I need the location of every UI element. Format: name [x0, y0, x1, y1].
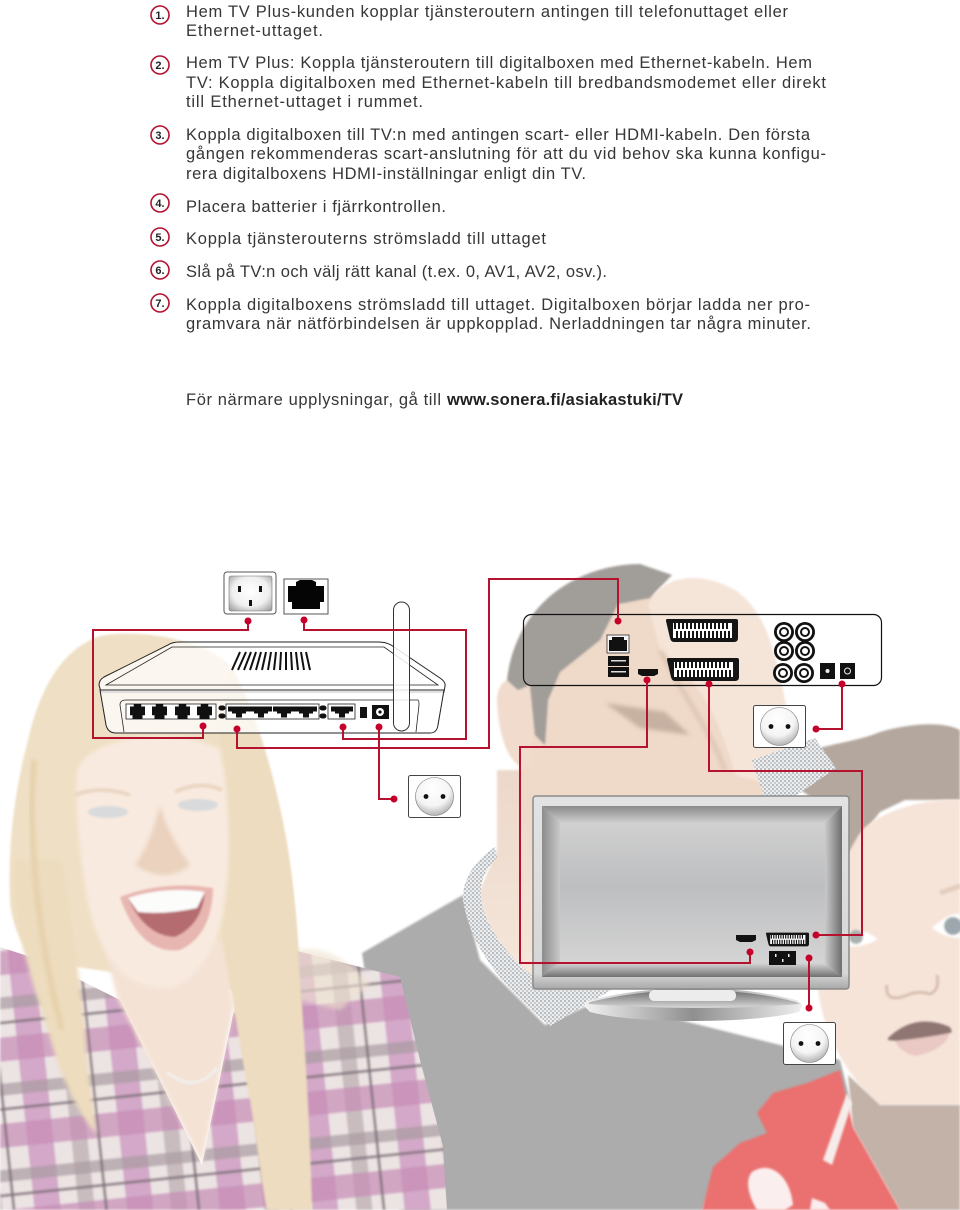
man sweater — [362, 895, 850, 1210]
icon: digital box — [524, 614, 882, 686]
cable: tv power — [806, 954, 812, 1012]
boy face — [818, 800, 960, 1105]
router ethernet ports — [226, 704, 319, 719]
instruction number 7 — [151, 294, 169, 312]
step 2 text: till Ethernet-uttaget i rummet. — [186, 93, 423, 111]
boy red hoodie — [702, 1070, 900, 1210]
icon: tv wall outlet — [784, 1022, 836, 1064]
router vents — [232, 652, 310, 670]
router power port — [372, 705, 389, 719]
router status dots — [221, 708, 223, 716]
tv stand — [584, 988, 802, 1021]
instruction number 3 — [151, 126, 169, 144]
girl left hair over shirt — [14, 860, 97, 1135]
box outline — [524, 614, 882, 686]
step 3 text: Koppla digitalboxen till TV:n med antingen scart- eller HDMI-kabeln. Den första — [186, 126, 811, 144]
instruction number 1 — [151, 6, 169, 24]
tv scart port — [766, 933, 809, 946]
boy eyes — [842, 886, 960, 947]
girl right hair band — [215, 669, 312, 1210]
tv HDMI port — [736, 935, 756, 942]
boy neck — [848, 1075, 960, 1210]
man shirt collar — [463, 847, 620, 1026]
man neck — [478, 770, 600, 990]
cable: box scart to tv — [706, 680, 862, 938]
man hand on head — [648, 578, 796, 785]
step 3 text — [186, 126, 826, 183]
hoodie details — [748, 1093, 852, 1210]
cable: router power — [376, 724, 398, 802]
tv bevel — [542, 806, 842, 977]
girl nose shadow — [135, 805, 190, 875]
step 1 text: Hem TV Plus-kunden kopplar tjänsteroutern antingen till telefonuttaget eller — [186, 3, 789, 21]
instruction number 2: 2. — [155, 60, 165, 72]
girl neck — [105, 940, 234, 1163]
icon: router wall outlet — [408, 776, 460, 818]
step 1 text — [186, 3, 789, 40]
step 2 text: Hem TV Plus: Koppla tjänsteroutern till digitalboxen med Ethernet-kabeln. Hem — [186, 54, 812, 72]
man hair — [507, 564, 672, 745]
background photo of family — [0, 564, 960, 1210]
icon: box wall outlet — [754, 706, 806, 748]
box RCA connectors — [773, 622, 815, 683]
girl smile — [120, 885, 213, 950]
cable: router socket loop — [93, 618, 252, 738]
box scart bottom — [667, 658, 739, 681]
further information link: www.sonera.fi/asiakastuki/TV — [446, 391, 683, 409]
instruction number 6: 6. — [155, 265, 165, 277]
cable: router to box ethernet — [234, 579, 622, 748]
boy hair — [772, 724, 960, 900]
girl face — [76, 736, 229, 988]
step 5 text: Koppla tjänsterouterns strömsladd till uttaget — [186, 230, 546, 248]
step 2 text — [186, 54, 826, 111]
step 1 text: Ethernet-uttaget. — [186, 22, 323, 40]
girl shoulder hair strands — [293, 949, 370, 1010]
router antenna — [394, 602, 410, 731]
tv frame — [533, 796, 849, 989]
instruction number 5: 5. — [155, 232, 165, 244]
router LAN ports — [126, 704, 216, 719]
instruction number 7: 7. — [155, 298, 165, 310]
box scart top — [666, 619, 738, 642]
cable: box power — [812, 680, 846, 732]
further information link: För närmare upplysningar, gå till — [186, 391, 441, 409]
step 6 text: Slå på TV:n och välj rätt kanal (t.ex. 0, AV1, AV2, osv.). — [186, 263, 607, 281]
icon: telephone jack — [284, 579, 328, 614]
step 7 text: gramvara när nätförbindelsen är uppkopplad. Nerladdningen tar några minuter. — [186, 315, 811, 333]
step 7 text: Koppla digitalboxens strömsladd till uttaget. Digitalboxen börjar ladda ner pro- — [186, 296, 810, 314]
tv screen — [560, 823, 825, 963]
router top surface — [99, 642, 445, 692]
man head skin — [511, 589, 792, 985]
instruction number 4 — [151, 194, 169, 212]
instruction number 2 — [151, 56, 169, 74]
icon: television — [533, 796, 849, 1021]
box USB ports — [608, 656, 629, 677]
further information link — [186, 391, 683, 409]
girl shirt plaid — [0, 930, 450, 1210]
instruction number 3: 3. — [155, 130, 165, 142]
girl eyes and brows — [75, 785, 222, 818]
man face shadows — [605, 650, 725, 770]
girl hair streak — [32, 760, 62, 1030]
step 7 text — [186, 296, 811, 333]
step 4 text: Placera batterier i fjärrkontrollen. — [186, 198, 446, 216]
man ear — [497, 679, 535, 767]
boy nose and mouth — [887, 975, 952, 1056]
girl back hair — [10, 634, 300, 1000]
man right collar — [752, 738, 836, 815]
box HDMI port — [638, 669, 658, 676]
icon: C13 power socket — [224, 572, 276, 614]
cable: router telephone loop — [300, 616, 466, 739]
cable: box HDMI to tv — [520, 676, 754, 963]
step 3 text: rera digitalboxens HDMI-inställningar enligt din TV. — [186, 165, 586, 183]
girl necklace — [167, 1068, 217, 1083]
tv power port — [769, 951, 796, 965]
box power ports — [820, 663, 855, 679]
icon: router — [99, 602, 445, 733]
router button — [360, 707, 367, 718]
step 2 text: TV: Koppla digitalboxen med Ethernet-kabeln till bredbandsmodemet eller direkt — [186, 74, 826, 92]
instruction number 1: 1. — [155, 10, 165, 22]
box ethernet port — [607, 635, 629, 653]
router WAN port — [328, 704, 355, 719]
router front body — [100, 690, 444, 733]
step 3 text: gången rekommenderas scart-anslutning för att du vid behov ska kunna konfigu- — [186, 145, 826, 163]
instruction number 6 — [151, 261, 169, 279]
instruction number 5 — [151, 228, 169, 246]
instruction number 4: 4. — [155, 198, 165, 210]
